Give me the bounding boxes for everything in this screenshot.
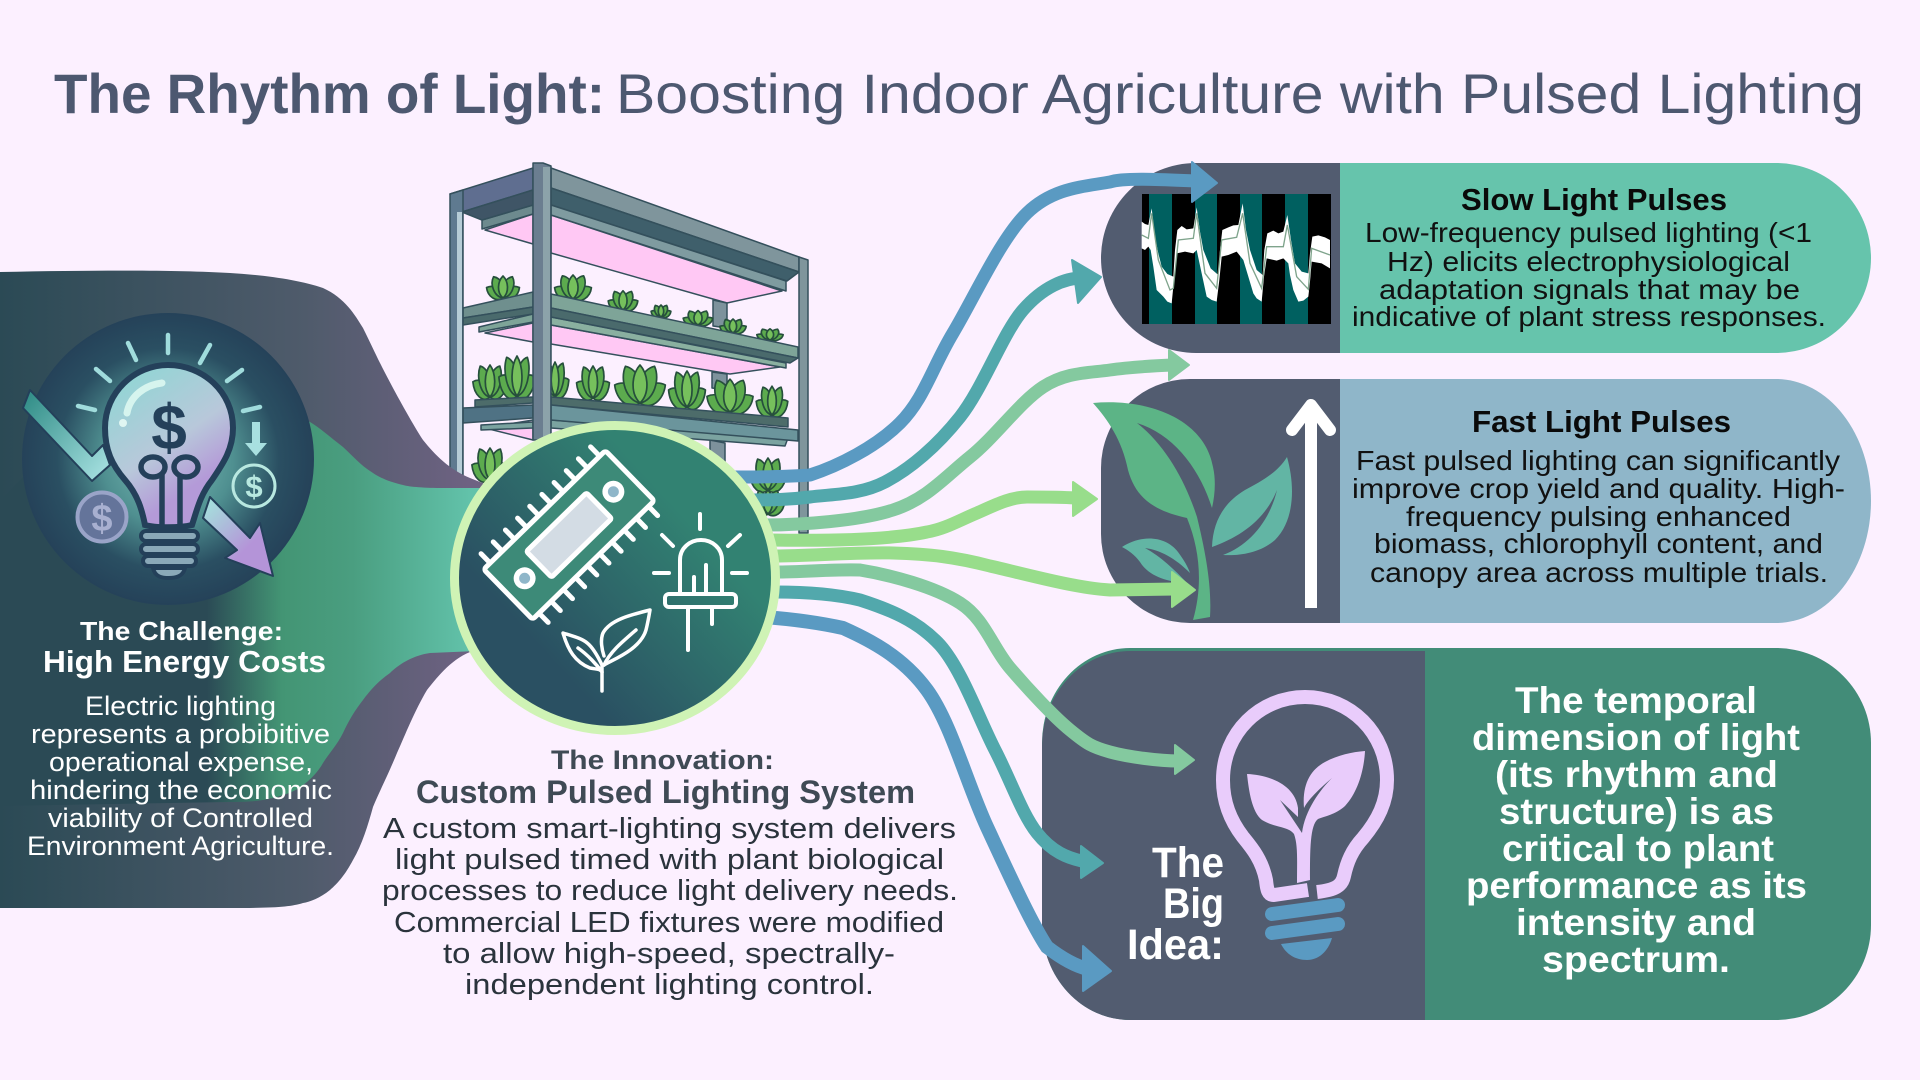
arrow: to bulb middle — [775, 592, 1103, 878]
arrows: light pulse flows — [735, 162, 1217, 991]
icon: light bulb with falling cost: $ — [91, 498, 113, 540]
icon: circuit chip — [475, 441, 663, 629]
panel: the challenge — [0, 271, 500, 908]
text: fast pulses body: canopy area across multiple trials. — [1370, 557, 1828, 588]
icon: sprout — [563, 610, 650, 691]
text: challenge body: hindering the economic — [30, 775, 332, 805]
title: Boosting Indoor Agriculture with Pulsed Lighting — [616, 62, 1864, 125]
panel: the big idea — [1042, 648, 1871, 1020]
heading: fast light pulses: Fast Light Pulses — [1472, 404, 1731, 439]
text: big idea statement: performance as its — [1466, 865, 1807, 906]
icon: custom lighting system circle — [454, 426, 776, 730]
text: big idea statement: intensity and — [1516, 902, 1756, 943]
text: innovation body: processes to reduce light delivery needs. — [382, 875, 958, 907]
text: slow pulses body: adaptation signals that may be — [1379, 274, 1800, 305]
icon: growing plant — [1093, 402, 1292, 620]
heading: the innovation: The Innovation: — [551, 745, 774, 775]
text: challenge body: operational expense, — [49, 747, 313, 777]
label: the big idea: Idea: — [1127, 921, 1224, 969]
title: The Rhythm of Light: — [54, 62, 605, 125]
arrow: to fast pulses panel — [770, 482, 1097, 540]
title — [54, 62, 1864, 125]
arrow: to slow pulses panel — [745, 260, 1101, 500]
illustration: vertical farm shelf — [450, 163, 808, 533]
text: challenge body: Environment Agriculture. — [27, 831, 334, 861]
text: slow pulses body: Low-frequency pulsed lighting (<1 — [1365, 217, 1812, 248]
text: big idea statement: dimension of light — [1472, 717, 1800, 758]
panel: fast light pulses — [1093, 379, 1871, 623]
panel background shape — [0, 271, 500, 908]
arrow: to bulb upper — [775, 570, 1194, 774]
heading: the challenge — [43, 616, 326, 679]
text: big idea statement — [1466, 680, 1807, 980]
label: the big idea: Big — [1163, 880, 1224, 928]
arrow: to plant icon — [775, 553, 1195, 607]
text: big idea statement: (its rhythm and — [1495, 754, 1778, 795]
heading: slow light pulses: Slow Light Pulses — [1461, 182, 1727, 217]
text: fast pulses body: frequency pulsing enhanced — [1406, 501, 1791, 532]
text: innovation body: Commercial LED fixtures were modified — [394, 907, 944, 939]
text: big idea statement: structure) is as — [1499, 791, 1774, 832]
plants row one — [484, 273, 785, 342]
icon: light bulb with falling cost: $ — [245, 469, 263, 504]
heading: the challenge: The Challenge: — [80, 616, 283, 646]
text: big idea statement: spectrum. — [1542, 939, 1730, 980]
heading: the innovation: Custom Pulsed Lighting System — [416, 774, 915, 810]
text: fast pulses body: Fast pulsed lighting can significantly — [1356, 445, 1840, 476]
chart: electrophysiology trace — [1142, 194, 1331, 324]
label: the big idea — [1127, 839, 1224, 969]
text: fast pulses body: improve crop yield and quality. High- — [1352, 473, 1845, 504]
text: innovation body: light pulsed timed with plant biological — [395, 844, 944, 876]
text: fast pulses body — [1352, 445, 1845, 588]
text: slow pulses body: indicative of plant stress responses. — [1352, 301, 1826, 332]
text: innovation body: independent lighting control. — [465, 969, 874, 1001]
text: innovation body: to allow high-speed, spectrally- — [443, 938, 895, 970]
arrow: to bulb lower — [765, 617, 1111, 991]
text: challenge body: viability of Controlled — [48, 803, 313, 833]
icon: LED — [654, 514, 747, 650]
text: big idea statement: The temporal — [1515, 680, 1757, 721]
plants row three — [469, 445, 789, 519]
plants row two — [470, 353, 790, 421]
text: fast pulses body: biomass, chlorophyll content, and — [1374, 528, 1823, 559]
arrow: upper green branch — [765, 350, 1189, 525]
heading: the innovation — [416, 745, 915, 810]
text: big idea statement: critical to plant — [1502, 828, 1774, 869]
text: innovation body: A custom smart-lighting system delivers — [383, 813, 956, 845]
green light beam — [0, 350, 500, 806]
icon: light bulb with falling cost: $ — [151, 391, 187, 463]
label: the big idea: The — [1152, 839, 1224, 887]
text: innovation body — [382, 813, 958, 1001]
text: challenge body: Electric lighting — [85, 691, 276, 721]
arrow: to slow pulses chart — [735, 162, 1217, 477]
icon: bulb with sprout — [1223, 697, 1387, 960]
panel: slow light pulses — [1101, 163, 1871, 353]
heading: the challenge: High Energy Costs — [43, 644, 326, 679]
text: slow pulses body: Hz) elicits electrophysiological — [1387, 246, 1790, 277]
text: challenge body: represents a probibitive — [31, 719, 330, 749]
text: slow pulses body — [1352, 217, 1826, 332]
text: challenge body — [27, 691, 334, 861]
icon: light bulb with falling cost — [22, 313, 314, 605]
arrow: growth up — [1292, 405, 1330, 608]
